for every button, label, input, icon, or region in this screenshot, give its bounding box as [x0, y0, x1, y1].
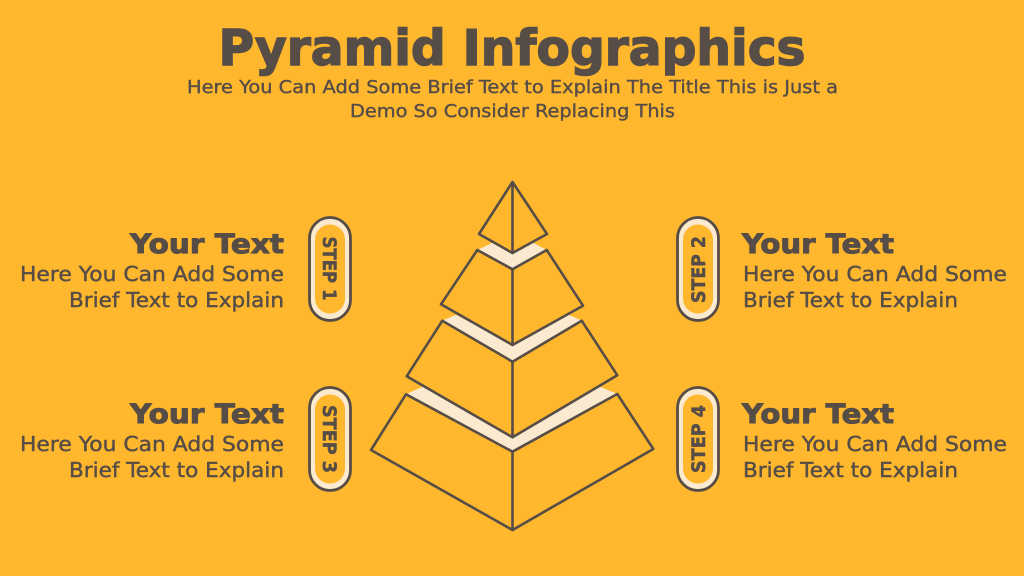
pyramid	[371, 182, 653, 530]
step 2 pill: STEP 2	[689, 236, 710, 303]
step 1 description: Brief Text to Explain	[69, 288, 284, 312]
step 1 pill	[310, 218, 350, 320]
pyramid tier 3	[407, 321, 617, 437]
step 4 pill	[678, 388, 718, 490]
step 2 description: Brief Text to Explain	[743, 288, 958, 312]
step 1 description	[20, 262, 284, 312]
pyramid tier 1	[479, 182, 547, 253]
step 4 description	[743, 432, 1007, 482]
step 3 block	[20, 388, 350, 490]
step 1 description: Here You Can Add Some	[20, 262, 284, 286]
step 4 description: Here You Can Add Some	[743, 432, 1007, 456]
step 4 block	[678, 388, 1007, 490]
step 3 heading: Your Text	[129, 399, 284, 430]
step 4 description: Brief Text to Explain	[743, 458, 958, 482]
subtitle: Here You Can Add Some Brief Text to Explain The Title This is Just a	[187, 77, 838, 98]
step 1 heading: Your Text	[129, 229, 284, 260]
cream band 2	[442, 315, 582, 362]
subtitle: Demo So Consider Replacing This	[350, 101, 675, 122]
cream band 3	[406, 387, 617, 452]
step 3 description: Brief Text to Explain	[69, 458, 284, 482]
step 3 pill	[310, 388, 350, 490]
step 4 pill: STEP 4	[689, 405, 710, 473]
step 2 pill	[678, 218, 718, 320]
step 1 pill: STEP 1	[318, 236, 339, 300]
title: Pyramid Infographics	[218, 20, 806, 77]
cream band 1	[477, 242, 547, 269]
step 2 heading: Your Text	[741, 229, 894, 260]
step 3 pill: STEP 3	[318, 405, 339, 473]
step 3 description	[20, 432, 284, 482]
step 2 description: Here You Can Add Some	[743, 262, 1007, 286]
step 1 block	[20, 218, 350, 320]
subtitle	[187, 77, 838, 122]
step 2 block	[678, 218, 1007, 320]
pyramid tier 4	[371, 394, 653, 530]
step 4 heading: Your Text	[741, 399, 894, 430]
step 2 description	[743, 262, 1007, 312]
step 3 description: Here You Can Add Some	[20, 432, 284, 456]
pyramid tier 2	[441, 250, 583, 345]
